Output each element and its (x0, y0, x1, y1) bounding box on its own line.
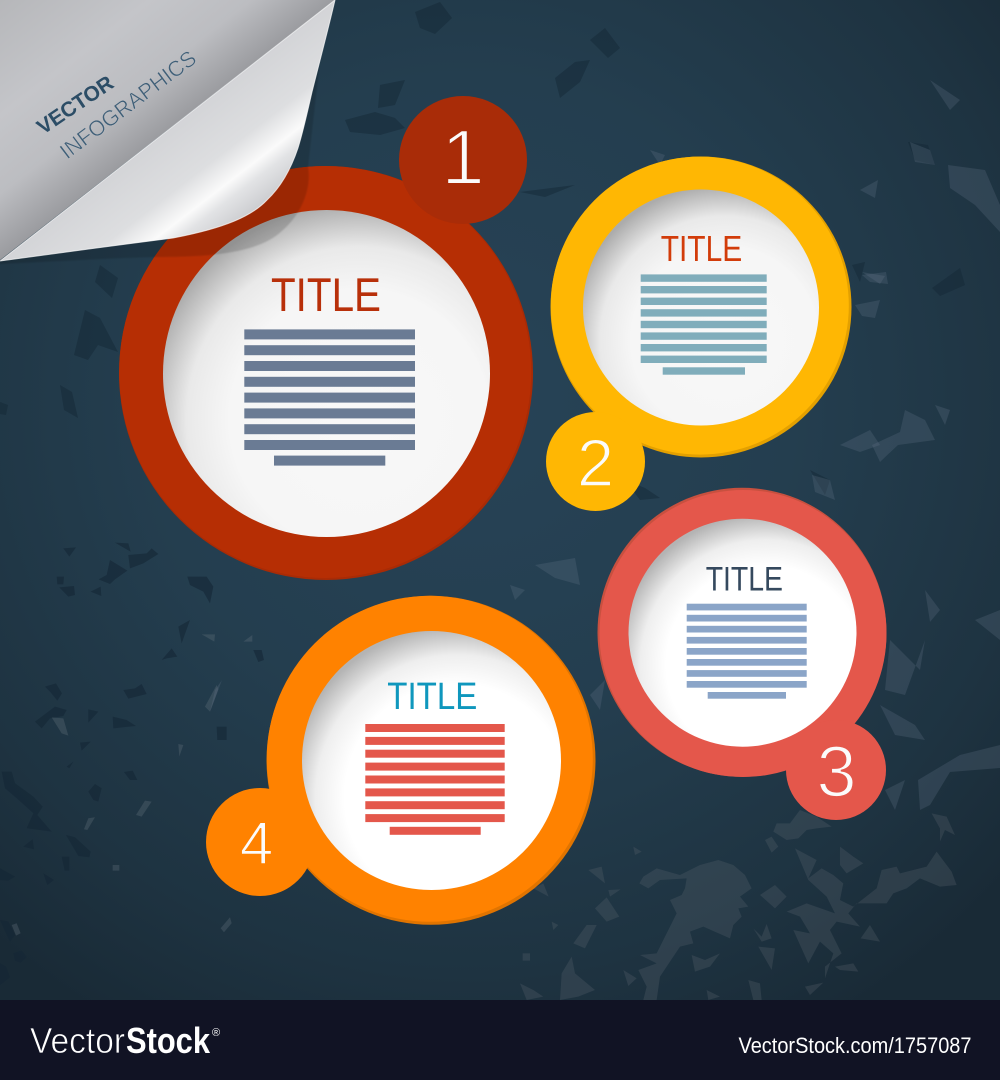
folded corner (0, 0, 335, 261)
heading 3: TITLE (706, 561, 783, 599)
panel: step 3 (598, 488, 886, 820)
page curl (0, 0, 335, 264)
text lines 1 (244, 329, 415, 466)
panel: step 4 (206, 596, 596, 925)
ring 1 (119, 166, 533, 580)
label: vector: VECTOR (33, 71, 118, 139)
number badge 1: 1 (441, 113, 485, 201)
number badge 2 (546, 412, 645, 511)
number badge 4: 4 (240, 810, 273, 877)
ring 3 (598, 488, 886, 777)
footer logo: ® (212, 1027, 220, 1039)
text lines 4 (365, 724, 505, 835)
heading 4: TITLE (387, 676, 477, 718)
footer logo (30, 1020, 220, 1061)
background grunge: dark specks lower left (0, 543, 264, 985)
panel: step 2 (546, 156, 852, 511)
grey underside with label (0, 0, 335, 260)
footer bar (0, 1000, 1000, 1080)
heading 2: TITLE (661, 228, 742, 269)
number badge 1 (399, 96, 527, 224)
background grunge: large light patches bottom right (520, 810, 957, 1000)
footer logo: Stock (126, 1020, 211, 1061)
background grunge: light flakes right (210, 80, 1000, 810)
inner disc 4 (302, 631, 561, 890)
number badge 2: 2 (577, 426, 614, 501)
text lines 3 (687, 604, 807, 699)
ring 2 (550, 156, 852, 458)
footer logo: Vector (30, 1020, 125, 1061)
number badge 4 (206, 788, 314, 896)
background grunge: light flakes left (12, 634, 252, 936)
heading 1: TITLE (271, 268, 381, 321)
text lines 2 (641, 274, 767, 375)
label: infographics: INFOGRAPHICS (55, 45, 201, 164)
background grunge: dark specks (0, 2, 965, 500)
number badge 3: 3 (816, 732, 857, 812)
ring 4 (266, 596, 596, 925)
inner disc 1 (163, 210, 490, 537)
inner disc 2 (583, 190, 819, 426)
number badge 3 (786, 720, 886, 820)
panel: step 1 (119, 96, 533, 580)
inner disc 3 (628, 519, 856, 747)
footer image id: VectorStock.com/1757087 (738, 1033, 972, 1058)
curl shadow (0, 60, 320, 264)
